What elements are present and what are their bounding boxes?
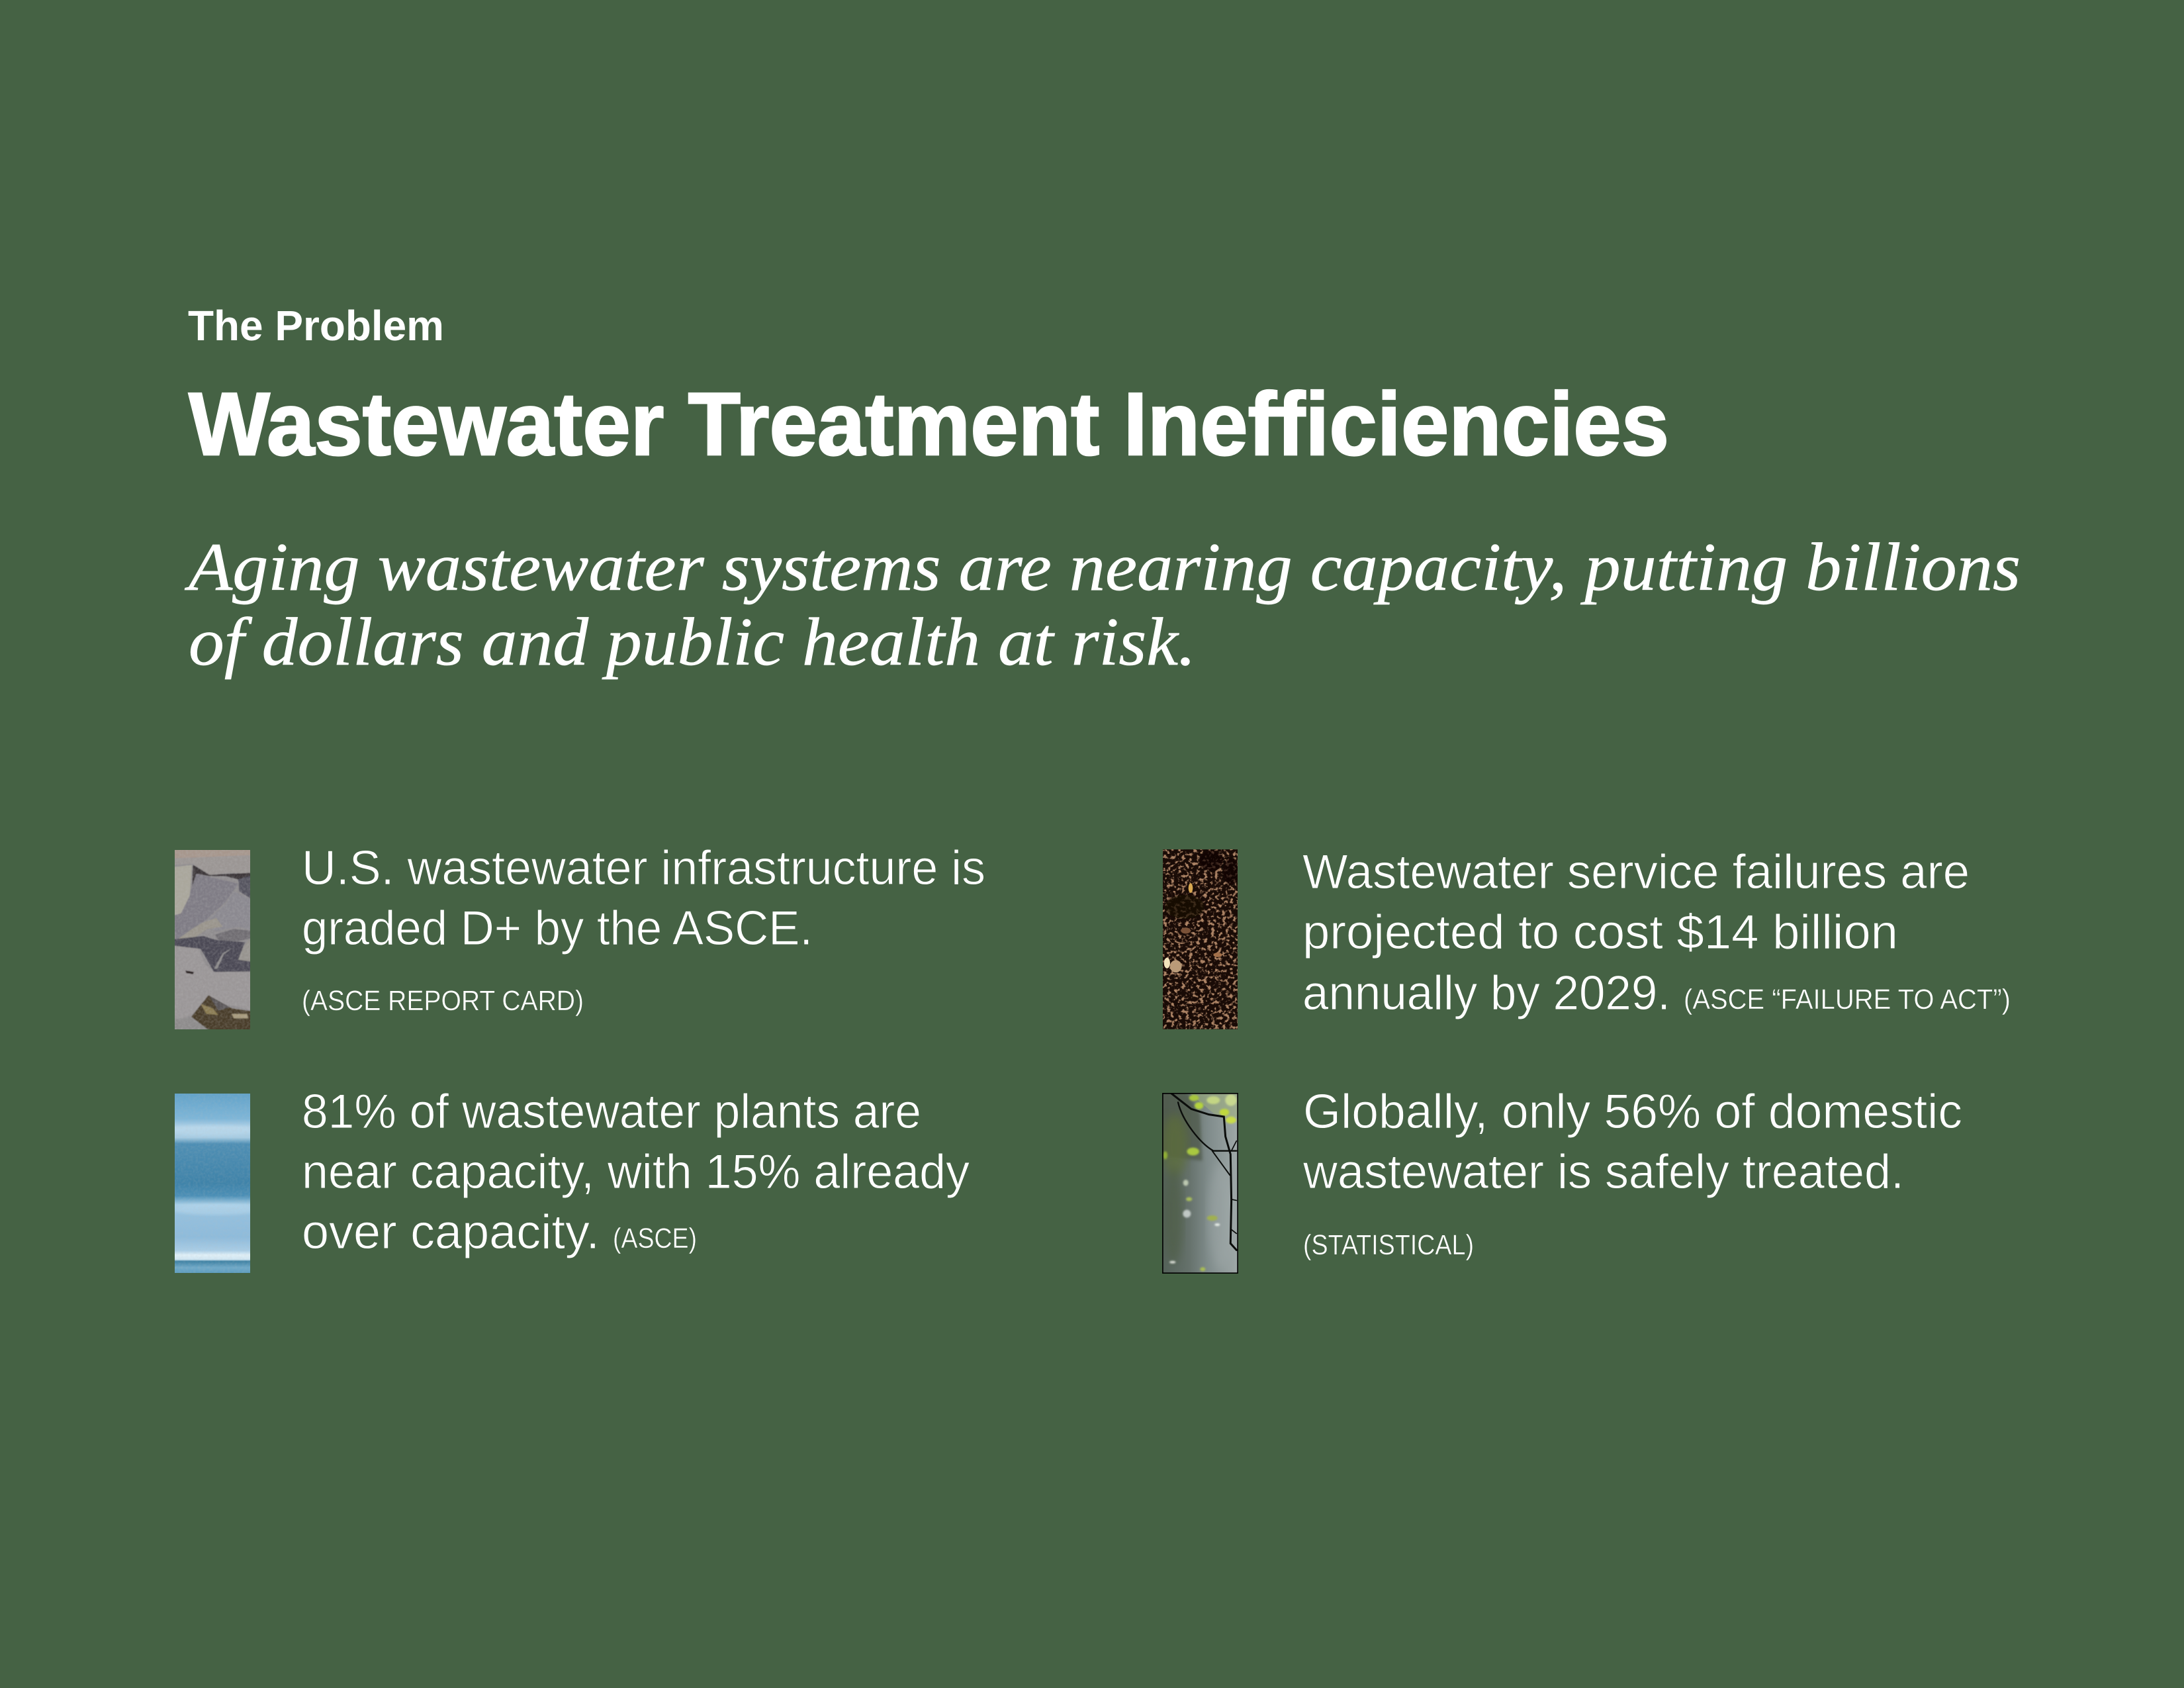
statement text: near capacity, with 15% already [302, 1145, 970, 1199]
statement text: graded D+ by the ASCE. [302, 902, 813, 955]
source note: (ASCE “FAILURE TO ACT”) [1684, 984, 2011, 1015]
icon: soil texture [1163, 849, 1238, 1029]
subtitle: of dollars and public health at risk. [189, 604, 1196, 680]
statement text: projected to cost $14 billion [1302, 906, 1898, 959]
panel: cost of failures [1163, 845, 2011, 1029]
statement text [302, 1085, 970, 1259]
icon: forest waterfall texture [1162, 1093, 1238, 1274]
statement text: wastewater is safely treated. [1302, 1145, 1904, 1199]
statement text: 81% of wastewater plants are [302, 1085, 921, 1139]
icon: rock texture [175, 850, 250, 1029]
title: Wastewater Treatment Inefficiencies [189, 374, 1669, 474]
statement text [302, 841, 985, 955]
eyebrow heading: The Problem [188, 302, 444, 350]
statement text: U.S. wastewater infrastructure is [302, 841, 985, 895]
panel: plant capacity [170, 1085, 970, 1273]
statement text: Globally, only 56% of domestic [1303, 1085, 1962, 1139]
subtitle [185, 530, 2021, 680]
statement text: Wastewater service failures are [1302, 845, 1970, 899]
subtitle: Aging wastewater systems are nearing capacity, putting billions [185, 530, 2021, 605]
source note: (ASCE) [613, 1223, 697, 1254]
icon: water texture [175, 1094, 250, 1273]
statement text [1302, 845, 1970, 1020]
statement text: annually by 2029. [1302, 966, 1670, 1020]
panel: infrastructure grade [172, 841, 985, 1033]
panel: global treatment [1161, 1085, 1962, 1274]
statement text [1302, 1085, 1962, 1199]
statement text: over capacity. [302, 1205, 600, 1259]
source note: (STATISTICAL) [1303, 1229, 1474, 1261]
source note: (ASCE REPORT CARD) [302, 985, 584, 1017]
